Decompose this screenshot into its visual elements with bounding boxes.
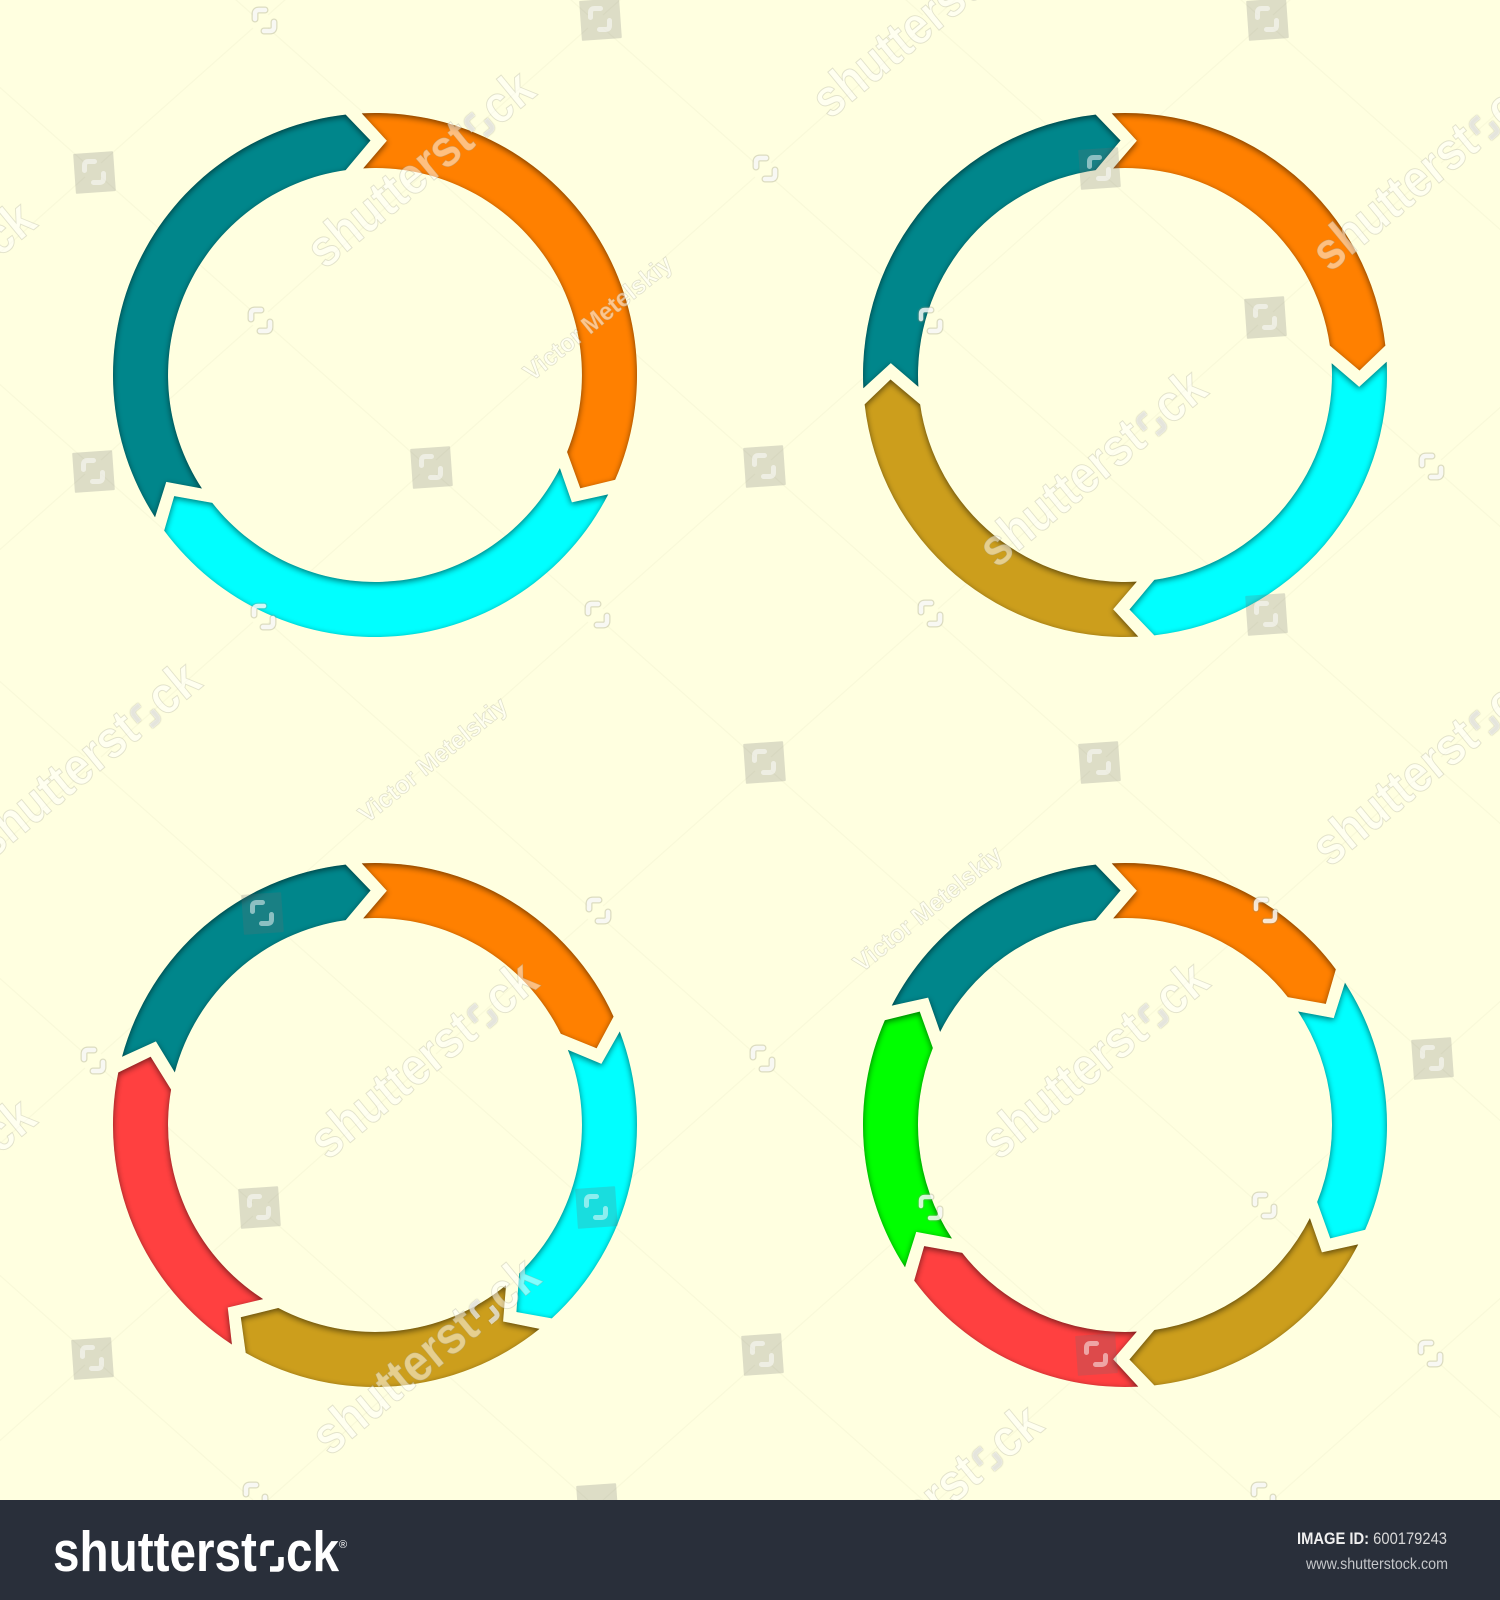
segment: cyan arrow — [1130, 362, 1387, 635]
website url: www.shutterstock.com — [1305, 1556, 1448, 1573]
ring: six-segment cycle — [793, 811, 1457, 1439]
watermark: shutterstock text repeats: shutterstock — [967, 357, 1218, 578]
footer logo: ® — [339, 1539, 347, 1551]
segment: orange arrow — [362, 113, 637, 488]
watermark: author name repeats: Victor Metelskiy — [518, 250, 678, 387]
segment: gold arrow — [1124, 1174, 1359, 1439]
segment: cyan arrow — [146, 307, 609, 733]
ring: five-segment cycle — [28, 817, 698, 1477]
ring: three-segment cycle — [17, 91, 637, 733]
watermark: shutterstock text repeats: shutterstock — [295, 58, 546, 279]
segment: gold arrow — [227, 1179, 540, 1477]
image id: IMAGE ID: 600179243 — [1297, 1529, 1447, 1548]
segment: teal arrow — [17, 91, 480, 517]
footer logo: shutterstock — [53, 1520, 339, 1584]
segment: orange arrow — [1112, 863, 1336, 1004]
segment: gold arrow — [865, 380, 1138, 637]
footer bar — [0, 1500, 1500, 1600]
segment: orange arrow — [1112, 113, 1385, 370]
watermark: shutterstock text repeats: shutterstock — [298, 949, 549, 1170]
ring: four-segment cycle — [863, 113, 1387, 637]
segment: orange arrow — [362, 863, 614, 1048]
segment: cyan arrow — [444, 1031, 698, 1328]
segment: red arrow — [28, 1047, 341, 1345]
segment: teal arrow — [891, 811, 1126, 1076]
segment: green arrow — [793, 1003, 1027, 1267]
watermark: shutterstock text repeats: shutterstock — [300, 1245, 551, 1466]
segment: cyan arrow — [1223, 983, 1457, 1247]
segment: teal arrow — [122, 817, 376, 1114]
watermark: author name repeats: Victor Metelskiy — [353, 692, 513, 829]
watermark: author name repeats: Victor Metelskiy — [848, 841, 1008, 978]
watermark: glyphs in squares — [82, 8, 1442, 1368]
segment: red arrow — [914, 1246, 1138, 1387]
watermark: shutterstock text repeats: shutterstock — [969, 949, 1220, 1170]
watermark: author name repeats — [353, 250, 1008, 978]
segment: teal arrow — [863, 115, 1120, 388]
